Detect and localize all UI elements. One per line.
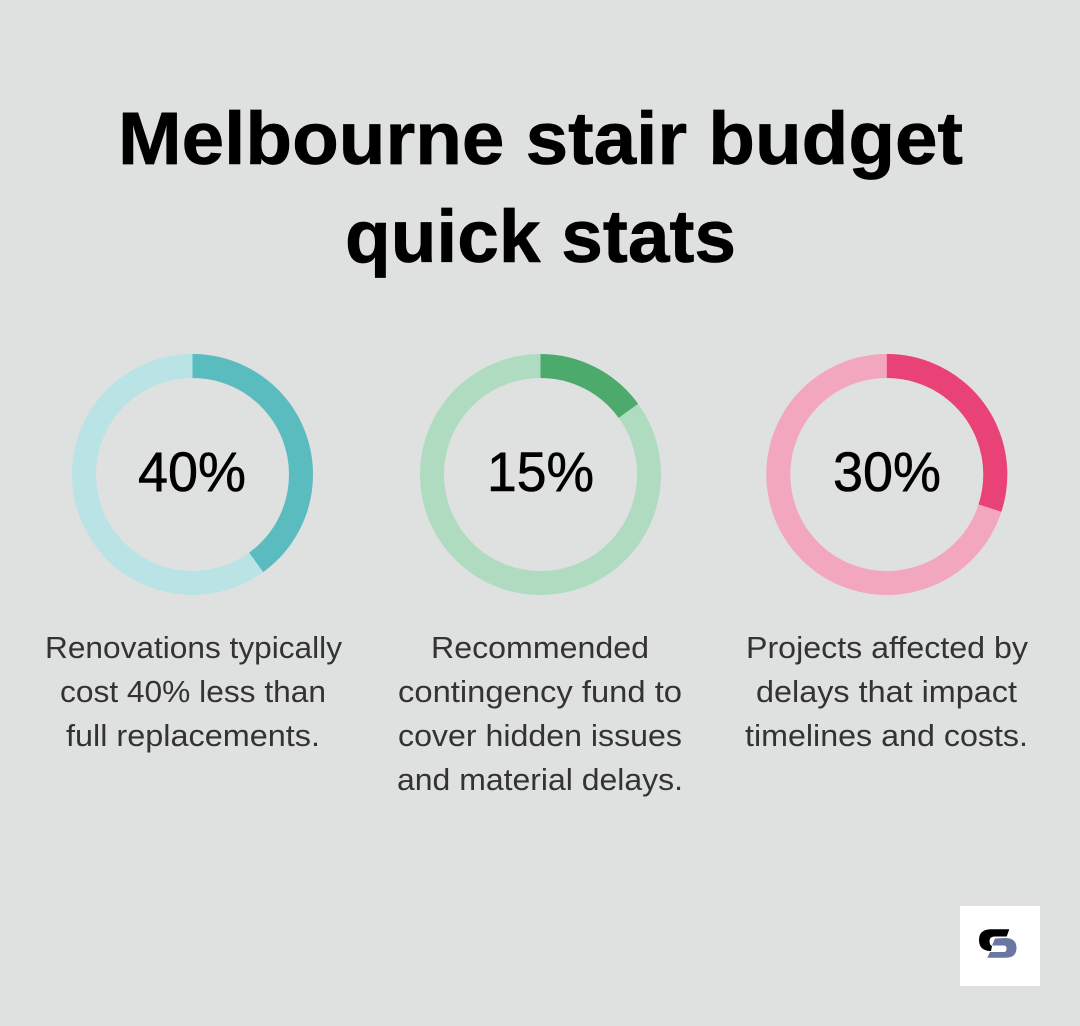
logo badge [960,906,1040,986]
value: 15%: 15% [487,440,594,503]
value: 40%: 40% [138,440,246,503]
description: 40% [45,630,343,753]
description: 30%: delays that impact [756,674,1017,709]
description: 15%: contingency fund to [398,674,682,709]
value: 30%: 30% [833,440,941,503]
panel: 15% stat [397,366,683,797]
logo: black part [979,929,1009,951]
panel: 30% stat [745,366,1029,753]
title [118,97,963,278]
description: 15% [397,630,683,797]
description: 15%: and material delays. [397,762,683,797]
description: 30%: timelines and costs. [745,718,1028,753]
description: 15%: Recommended [431,630,649,665]
description: 30%: Projects affected by [746,630,1029,665]
description: 30% [745,630,1029,753]
title: quick stats [345,195,736,278]
title: Melbourne stair budget [118,97,963,180]
description: 40%: cost 40% less than [60,674,326,709]
logo: blue part [987,938,1016,958]
description: 40%: Renovations typically [45,630,343,665]
description: 40%: full replacements. [66,718,320,753]
description: 15%: cover hidden issues [398,718,682,753]
donut chart: 15% [432,366,649,583]
panel: 40% stat [45,366,343,753]
donut chart: 30% [778,366,995,583]
donut chart: 40% [84,366,301,583]
